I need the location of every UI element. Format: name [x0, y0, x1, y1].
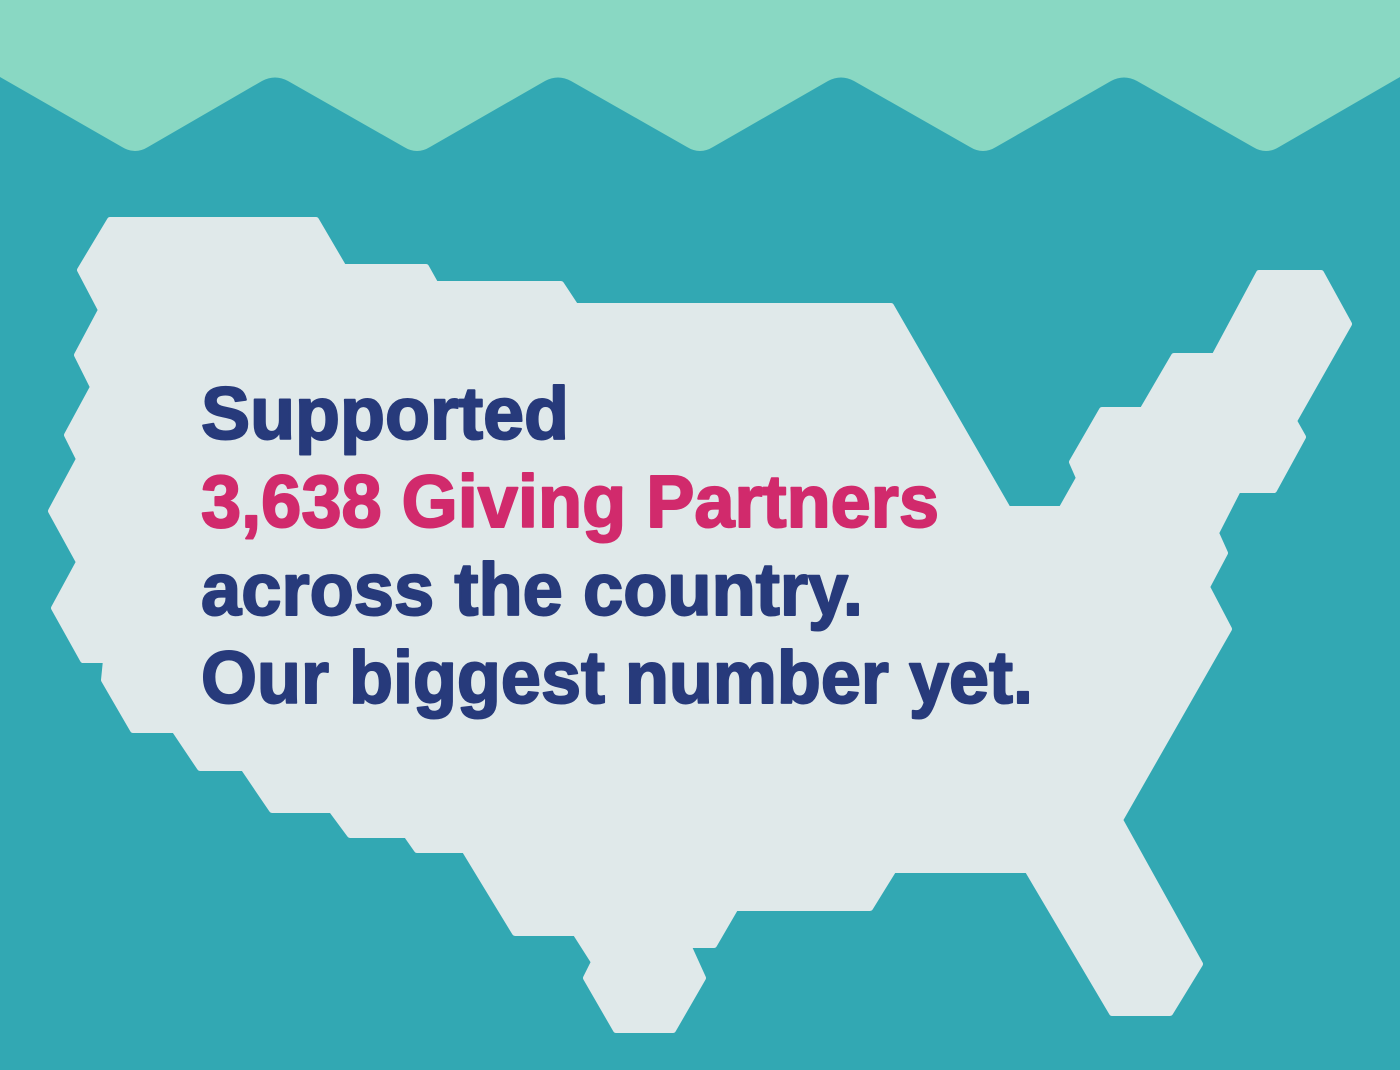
text block: headline — [201, 372, 1033, 719]
headline line 1: Supported — [201, 372, 569, 455]
headline line 2: highlighted number: 3,638 Giving Partners — [201, 460, 939, 543]
headline line 3: across the country. — [201, 548, 863, 631]
map: hexagonal United States silhouette — [51, 220, 1349, 1030]
headline line 4: Our biggest number yet. — [201, 636, 1033, 719]
top band: mint zigzag — [0, 0, 1400, 151]
